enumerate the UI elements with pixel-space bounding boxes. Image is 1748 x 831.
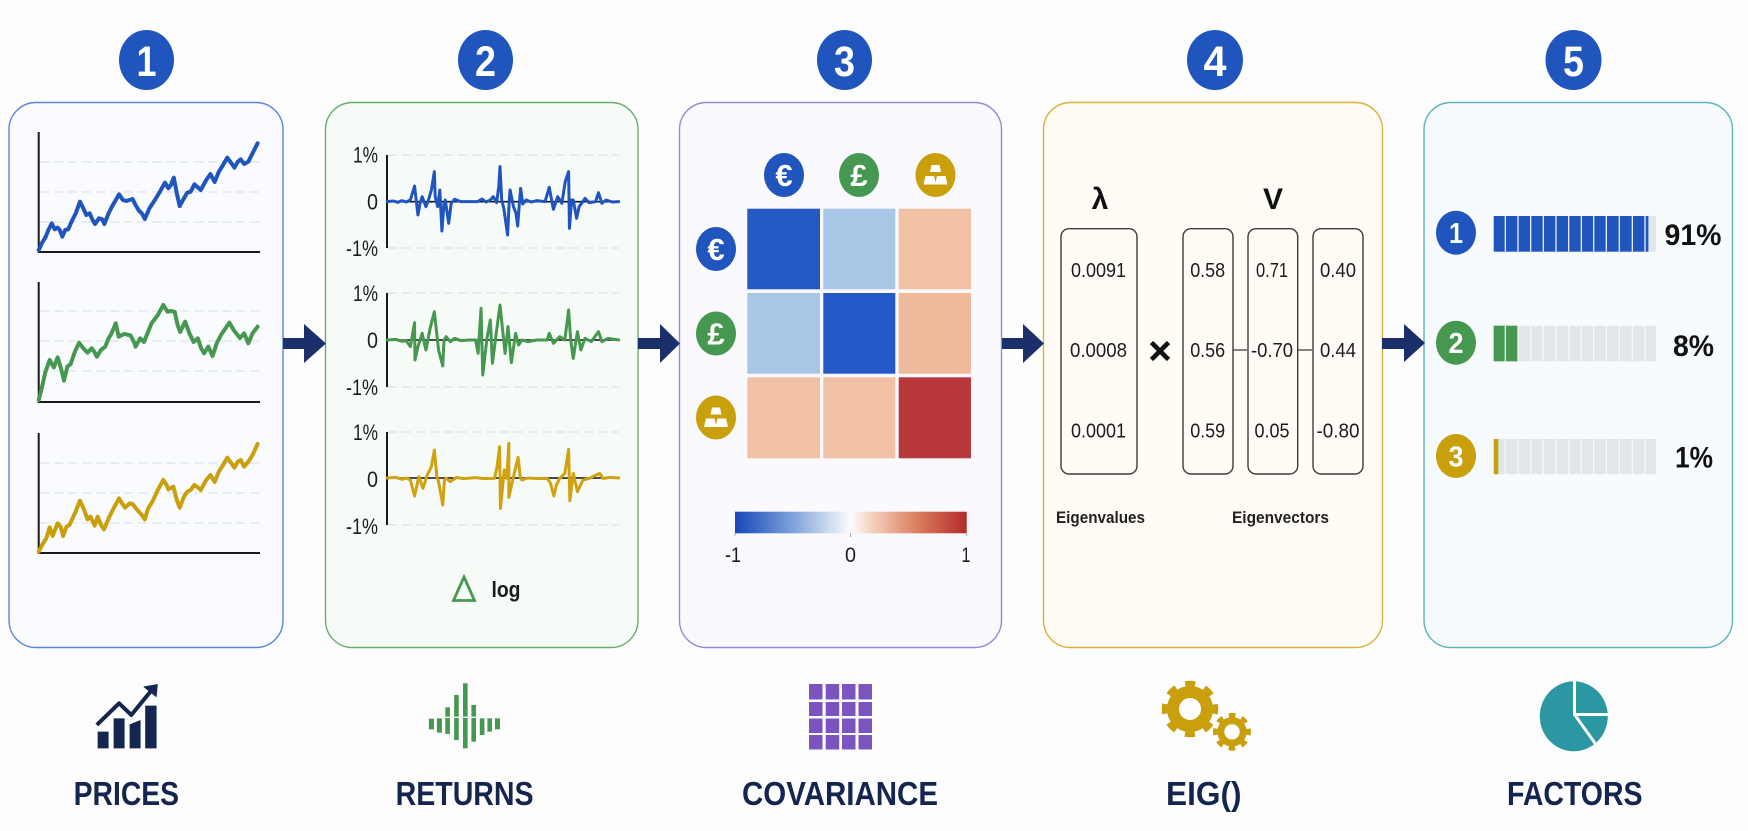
chart: pound returns: -1% xyxy=(346,375,378,400)
step badge 2: 2 xyxy=(475,38,496,86)
chart: gold price line xyxy=(39,433,260,553)
icon: returns waveform xyxy=(429,683,500,748)
step badge 5: 5 xyxy=(1563,38,1584,86)
eigenvector column 2: 0.71 xyxy=(1256,260,1288,282)
delta log label: log xyxy=(492,577,520,602)
step badge 1 xyxy=(119,30,174,90)
row header: euro: € xyxy=(707,232,725,267)
eigenvalue column: 0.0001 xyxy=(1071,420,1126,442)
step badge 1: 1 xyxy=(136,38,156,86)
icon: pie chart xyxy=(1540,680,1609,751)
eigenvector column 3 xyxy=(1313,229,1363,474)
factor 2 row xyxy=(1436,321,1714,365)
factor 2 row: 8% xyxy=(1673,330,1714,363)
arrow: returns to covariance xyxy=(638,324,680,363)
delta log label xyxy=(454,577,520,602)
step badge 5 xyxy=(1546,30,1602,90)
panel: returns xyxy=(326,102,638,648)
label: covariance: COVARIANCE xyxy=(742,775,938,812)
label: factors: FACTORS xyxy=(1507,775,1642,812)
chart: pound price line xyxy=(39,282,260,402)
color scale legend: 0 xyxy=(845,544,856,567)
eigenvector column 1: 0.56 xyxy=(1190,340,1225,362)
column header: pound: £ xyxy=(850,158,868,193)
arrow: covariance to eig xyxy=(1002,324,1044,363)
factor 3 row: 1% xyxy=(1675,442,1713,474)
chart: gold returns xyxy=(346,420,619,539)
eigenvector column 3: -0.80 xyxy=(1316,420,1360,442)
step badge 4 xyxy=(1187,30,1243,90)
row header: pound xyxy=(696,312,736,356)
chart: gold returns: 1% xyxy=(353,420,378,445)
column header: gold bars xyxy=(916,153,956,197)
panel: eigendecomposition xyxy=(1044,102,1382,648)
arrow: eig to factors xyxy=(1382,324,1425,362)
step badge 3: 3 xyxy=(834,38,855,86)
color scale legend: 1 xyxy=(962,544,970,567)
eigenvector column 2: 0.05 xyxy=(1254,420,1290,442)
icon: prices chart xyxy=(97,684,158,748)
label: eig: EIG() xyxy=(1166,775,1242,812)
factor 3 row: 3 xyxy=(1448,442,1464,474)
multiply sign xyxy=(1152,342,1168,360)
chart: euro price line xyxy=(39,132,260,252)
eigenvector column 1 xyxy=(1183,229,1233,474)
factor 1 row xyxy=(1436,211,1722,255)
chart: gold returns: 0 xyxy=(367,467,378,492)
column header: euro xyxy=(764,153,804,197)
factor 2 row: 2 xyxy=(1448,328,1464,360)
eigenvalue column: 0.0008 xyxy=(1070,340,1127,362)
chart: euro returns: -1% xyxy=(346,236,378,261)
row header: pound: £ xyxy=(707,316,725,352)
eigenvector column 3: 0.44 xyxy=(1320,340,1356,362)
lambda heading: λ xyxy=(1092,183,1109,216)
icon: covariance grid xyxy=(809,684,872,750)
chart: gold returns: -1% xyxy=(346,514,378,539)
eigenvalue column: 0.0091 xyxy=(1071,260,1126,282)
heatmap matrix xyxy=(747,209,971,458)
arrow: prices to returns xyxy=(283,324,326,363)
step badge 2 xyxy=(458,30,513,90)
factor 3 row xyxy=(1436,434,1713,478)
step badge 3 xyxy=(817,30,872,90)
icon: gears xyxy=(1164,684,1249,748)
panel: covariance xyxy=(680,102,1002,648)
eigenvalues caption: Eigenvalues xyxy=(1056,508,1145,527)
panel: factors xyxy=(1424,102,1732,648)
eigenvector column 2 xyxy=(1248,229,1298,474)
chart: euro returns: 0 xyxy=(367,190,378,214)
panel: prices xyxy=(9,102,283,648)
eigenvector column 1: 0.58 xyxy=(1190,260,1225,282)
eigenvector column 1: 0.59 xyxy=(1190,420,1225,442)
chart: pound returns: 1% xyxy=(353,281,378,306)
connector ticks xyxy=(1233,349,1312,351)
column header: pound xyxy=(839,153,879,197)
factor 1 row: 1 xyxy=(1449,218,1463,250)
row header: euro xyxy=(696,227,736,271)
chart: pound returns: 0 xyxy=(367,328,378,353)
column header: euro: € xyxy=(775,158,793,193)
label: returns: RETURNS xyxy=(396,775,534,812)
eigenvalue column xyxy=(1061,229,1137,474)
color scale legend: -1 xyxy=(725,544,741,567)
chart: euro returns xyxy=(346,142,619,261)
chart: euro returns: 1% xyxy=(353,142,378,168)
row header: gold bars xyxy=(696,396,736,440)
eigenvectors caption: Eigenvectors xyxy=(1232,508,1329,527)
chart: pound returns xyxy=(346,281,619,400)
step badge 4: 4 xyxy=(1204,38,1227,86)
color scale legend xyxy=(725,512,970,567)
factor 1 row: 91% xyxy=(1664,219,1722,252)
V heading: V xyxy=(1263,183,1283,216)
eigenvector column 2: -0.70 xyxy=(1251,340,1293,362)
eigenvector column 3: 0.40 xyxy=(1320,260,1356,282)
label: prices: PRICES xyxy=(74,775,179,812)
